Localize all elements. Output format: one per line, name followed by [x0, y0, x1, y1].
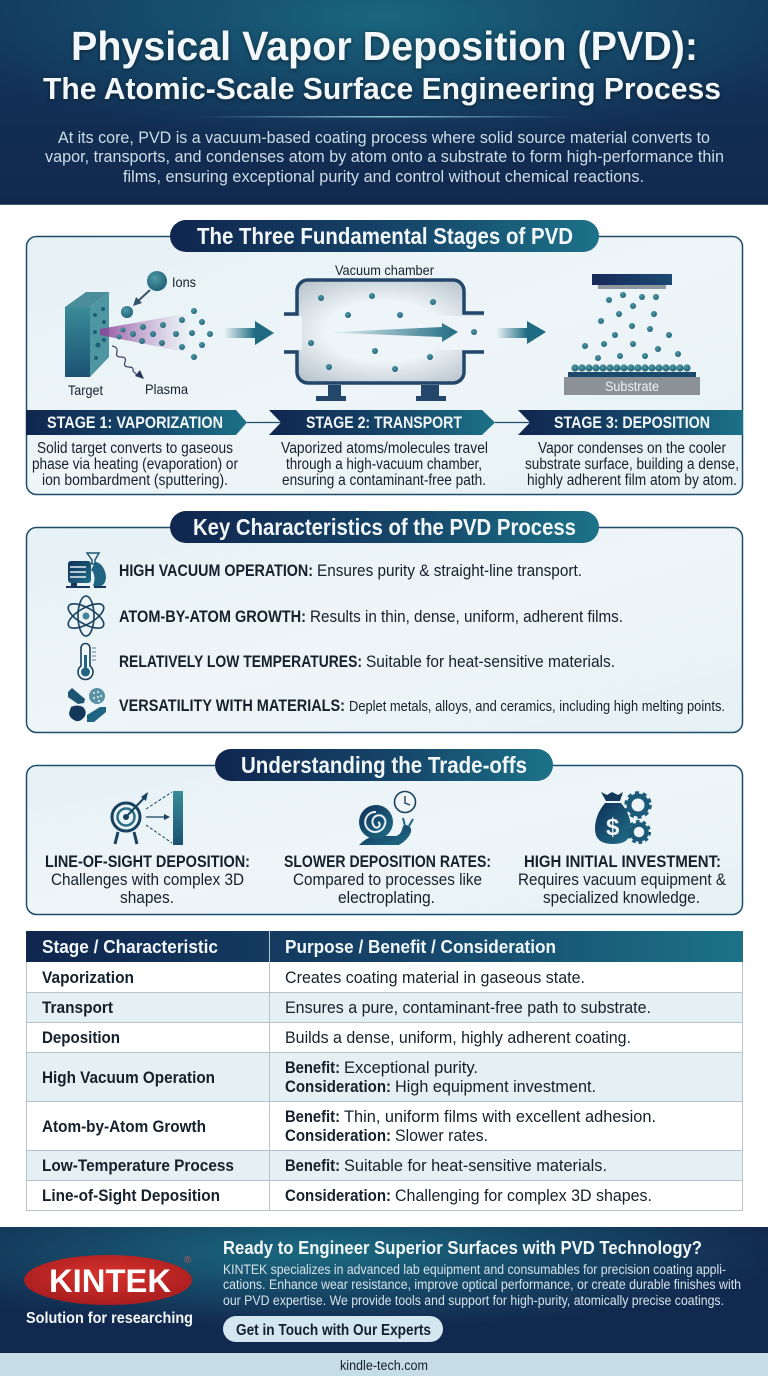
call to action text: KINTEK specializes in advanced lab equipment and consumables for precision coating appli- — [223, 1262, 726, 1277]
stage 1 banner: STAGE 1: VAPORIZATION — [47, 414, 223, 432]
icon: vacuum pump — [66, 553, 106, 588]
table second column: Exceptional purity. — [344, 1058, 478, 1077]
arrow: transport to deposition — [496, 321, 546, 344]
intro paragraph: films, ensuring exceptional purity and control without chemical reactions. — [123, 168, 644, 186]
table second column: Consideration: — [285, 1186, 391, 1205]
row: low temperatures: Suitable for heat-sensitive materials. — [366, 653, 615, 671]
logo: KINTEK: ® — [184, 1255, 192, 1266]
table second column: Consideration: — [285, 1077, 391, 1096]
trade-off: line of sight: LINE-OF-SIGHT DEPOSITION: — [45, 853, 250, 871]
call to action heading: Ready to Engineer Superior Surfaces with PVD Technology? — [223, 1237, 702, 1258]
button: contact — [223, 1316, 443, 1342]
stage 1 description: phase via heating (evaporation) or — [32, 456, 238, 473]
icon: snail with clock — [359, 792, 416, 845]
table header: Purpose / Benefit / Consideration — [285, 936, 556, 957]
trade-off: slower rates: electroplating. — [338, 889, 435, 907]
table first column: Vaporization — [42, 968, 134, 987]
trade-off: slower rates — [284, 853, 491, 907]
table second column: Benefit: — [285, 1058, 340, 1077]
trade-off: line of sight: shapes. — [120, 889, 174, 907]
title: Physical Vapor Deposition (PVD): — [71, 23, 698, 69]
row: atom-by-atom growth: ATOM-BY-ATOM GROWTH: — [119, 608, 306, 626]
trade-off: slower rates: Compared to processes like — [293, 871, 482, 889]
intro paragraph: At its core, PVD is a vacuum-based coating process where solid source material converts to — [58, 129, 710, 147]
panel: trade-offs — [26, 749, 742, 914]
table second column: Benefit: — [285, 1156, 340, 1175]
table second column: Thin, uniform films with excellent adhesion. — [344, 1107, 656, 1126]
intro paragraph — [45, 129, 724, 186]
trade-off: line of sight: Challenges with complex 3D — [51, 871, 244, 889]
icon: materials — [68, 688, 106, 722]
stage 2 description: ensuring a contaminant-free path. — [282, 472, 486, 489]
stage 2 description: through a high-vacuum chamber, — [286, 456, 482, 473]
title: The Atomic-Scale Surface Engineering Process — [43, 71, 721, 106]
table first column: Atom-by-Atom Growth — [42, 1117, 206, 1136]
heading pill: trade-offs: Understanding the Trade-offs — [241, 752, 527, 778]
table first column: Transport — [42, 998, 113, 1017]
label: Target: Target — [68, 382, 103, 398]
label: Ions: Ions — [172, 274, 196, 290]
stage 2 description: Vaporized atoms/molecules travel — [281, 440, 488, 457]
stage 3 description: Vapor condenses on the cooler — [538, 440, 726, 457]
row: high vacuum operation: Ensures purity & straight-line transport. — [317, 562, 582, 580]
icon: money bag and gears — [595, 792, 650, 844]
comparison table — [26, 931, 743, 1210]
table first column: High Vacuum Operation — [42, 1068, 215, 1087]
table second column: Benefit: — [285, 1107, 340, 1126]
arrow: vaporization to transport — [224, 321, 274, 345]
row: versatility with materials: Deplet metals, alloys, and ceramics, including high melting points. — [349, 699, 725, 715]
stage 2 banner — [269, 410, 495, 435]
table second column: Suitable for heat-sensitive materials. — [344, 1156, 607, 1175]
row: versatility with materials: VERSATILITY WITH MATERIALS: — [119, 697, 345, 715]
trade-off: high investment — [518, 853, 726, 907]
stage 3 banner: STAGE 3: DEPOSITION — [554, 414, 710, 432]
table second column: Challenging for complex 3D shapes. — [395, 1186, 652, 1205]
table header: Stage / Characteristic — [42, 936, 218, 957]
table header — [42, 936, 556, 957]
diagram: vaporization — [65, 271, 213, 398]
header banner — [0, 0, 768, 205]
footer call to action — [0, 1227, 768, 1353]
row: high vacuum operation — [119, 562, 582, 580]
stage 1 description: Solid target converts to gaseous — [37, 440, 233, 457]
row: versatility with materials — [119, 697, 725, 715]
icon: atom — [65, 596, 107, 636]
stage 3 banner — [518, 410, 743, 435]
table second column: Builds a dense, uniform, highly adherent coating. — [285, 1028, 631, 1047]
title — [43, 23, 721, 106]
icon: thermometer — [78, 644, 96, 680]
trade-off: high investment: HIGH INITIAL INVESTMENT: — [524, 853, 721, 871]
stage 1 banner — [26, 410, 247, 435]
stage 2 banner: STAGE 2: TRANSPORT — [306, 414, 462, 432]
call to action text — [223, 1262, 741, 1308]
stage 1 description: ion bombardment (sputtering). — [42, 472, 228, 489]
logo: KINTEK — [24, 1255, 192, 1305]
label: substrate: Substrate — [605, 379, 659, 394]
table second column — [285, 968, 656, 1205]
panel: three fundamental stages — [26, 220, 743, 494]
trade-off: high investment: specialized knowledge. — [543, 889, 700, 907]
call to action text: our PVD expertise. We provide tools and support for high-purity, atomically precise coatings. — [223, 1293, 724, 1308]
website strip: kindle-tech.com — [340, 1358, 428, 1373]
diagram: deposition — [564, 274, 700, 395]
icon: target with line of sight — [112, 791, 183, 845]
diagram: vacuum chamber — [282, 262, 486, 401]
label: Plasma: Plasma — [145, 381, 188, 397]
logo: KINTEK: KINTEK — [49, 1263, 171, 1299]
stage 3 description: highly adherent film atom by atom. — [527, 472, 737, 489]
heading pill: stages: The Three Fundamental Stages of PVD — [197, 223, 573, 249]
trade-off: line of sight — [45, 853, 250, 907]
table first column: Line-of-Sight Deposition — [42, 1186, 220, 1205]
intro paragraph: vapor, transports, and condenses atom by atom onto a substrate to form high-performance thin — [45, 148, 724, 166]
stage 3 description: substrate surface, building a dense, — [525, 456, 739, 473]
panel: key characteristics — [26, 511, 742, 732]
heading pill: characteristics: Key Characteristics of the PVD Process — [193, 514, 576, 540]
icon: money bag and gears: $ — [606, 814, 620, 841]
table first column — [42, 968, 234, 1205]
table second column: Ensures a pure, contaminant-free path to substrate. — [285, 998, 651, 1017]
trade-off: high investment: Requires vacuum equipment & — [518, 871, 726, 889]
row: low temperatures: RELATIVELY LOW TEMPERATURES: — [119, 653, 362, 671]
row: atom-by-atom growth — [119, 608, 623, 626]
stage 2 description — [281, 440, 488, 489]
trade-off: slower rates: SLOWER DEPOSITION RATES: — [284, 853, 491, 871]
tagline: Solution for researching — [26, 1310, 193, 1327]
table second column: Creates coating material in gaseous state. — [285, 968, 585, 987]
table second column: Slower rates. — [395, 1126, 488, 1145]
stage 1 description — [32, 440, 238, 489]
table second column: High equipment investment. — [395, 1077, 596, 1096]
website strip — [0, 1353, 768, 1376]
table first column: Low-Temperature Process — [42, 1156, 234, 1175]
label: vacuum chamber: Vacuum chamber — [335, 262, 434, 278]
table second column: Consideration: — [285, 1126, 391, 1145]
stage 3 description — [525, 440, 739, 489]
button: contact: Get in Touch with Our Experts — [236, 1322, 431, 1339]
row: high vacuum operation: HIGH VACUUM OPERATION: — [119, 562, 313, 580]
row: atom-by-atom growth: Results in thin, dense, uniform, adherent films. — [310, 608, 623, 626]
row: low temperatures — [119, 653, 615, 671]
table first column: Deposition — [42, 1028, 120, 1047]
